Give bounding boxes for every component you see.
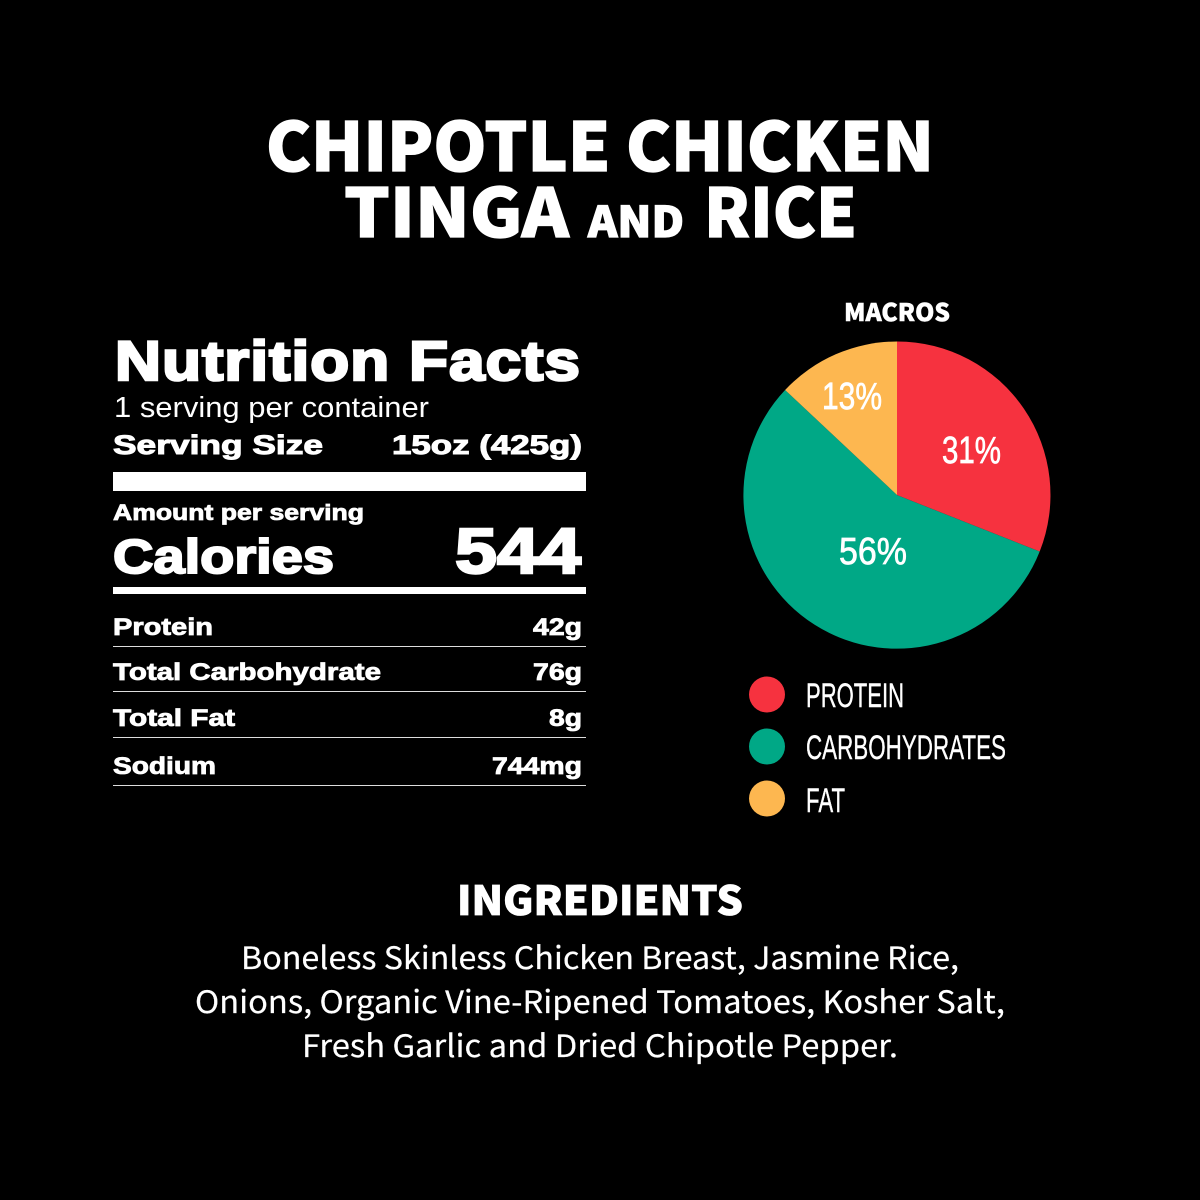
pie chart: macros: 13% xyxy=(822,376,882,418)
row: total carbohydrate: 76g xyxy=(533,659,582,686)
text: ingredients list: Boneless Skinless Chicken Breast, Jasmine Rice, xyxy=(241,933,959,978)
title: CHIPOTLE CHICKEN xyxy=(266,94,934,191)
row: protein: 42g xyxy=(533,614,582,641)
heading: macros: MACROS xyxy=(844,293,950,328)
slice: carbohydrates 56% xyxy=(743,390,1040,649)
pie chart: macros: 56% xyxy=(839,531,907,573)
text: ingredients list: Onions, Organic Vine-Ripened Tomatoes, Kosher Salt, xyxy=(195,977,1005,1022)
row: sodium: 744mg xyxy=(492,753,582,780)
text: servings per container: 1 serving per container xyxy=(114,392,429,424)
title: AND xyxy=(587,189,684,250)
title xyxy=(266,94,934,257)
text: ingredients list xyxy=(195,933,1005,1066)
row: total fat: 8g xyxy=(549,705,582,732)
legend xyxy=(749,676,1006,820)
row: total fat: Total Fat xyxy=(113,705,235,732)
row: sodium: Sodium xyxy=(113,753,216,780)
row: protein: Protein xyxy=(113,614,213,641)
legend item: protein xyxy=(749,676,904,715)
legend item: carbohydrates xyxy=(749,728,1006,767)
serving size row: Serving Size xyxy=(113,430,323,460)
serving size row xyxy=(113,430,582,460)
row: protein xyxy=(113,614,582,641)
slice: protein 31% xyxy=(897,342,1050,552)
row: sodium xyxy=(113,753,582,780)
row: total carbohydrate: Total Carbohydrate xyxy=(113,659,381,686)
title: RICE xyxy=(704,160,857,257)
pie chart: macros xyxy=(743,342,1050,649)
title: TINGA xyxy=(344,160,570,257)
panel: nutrition facts xyxy=(113,329,586,786)
text: amount per serving: Amount per serving xyxy=(113,500,364,525)
legend item: fat: FAT xyxy=(806,782,845,820)
serving size row: 15oz (425g) xyxy=(392,430,582,460)
text: ingredients list: Fresh Garlic and Dried Chipotle Pepper. xyxy=(302,1021,898,1066)
row: total fat xyxy=(113,705,582,732)
heading: ingredients: INGREDIENTS xyxy=(457,869,743,927)
calories row: 544 xyxy=(455,515,581,587)
heading: nutrition facts: Nutrition Facts xyxy=(115,329,581,392)
legend item: fat xyxy=(749,780,845,820)
calories row: Calories xyxy=(113,531,334,584)
calories row xyxy=(113,515,581,587)
legend item: carbohydrates: CARBOHYDRATES xyxy=(806,729,1006,767)
slice: fat 13% xyxy=(785,342,897,495)
legend item: protein: PROTEIN xyxy=(806,677,904,715)
pie chart: macros: 31% xyxy=(942,430,1001,472)
row: total carbohydrate xyxy=(113,659,582,686)
